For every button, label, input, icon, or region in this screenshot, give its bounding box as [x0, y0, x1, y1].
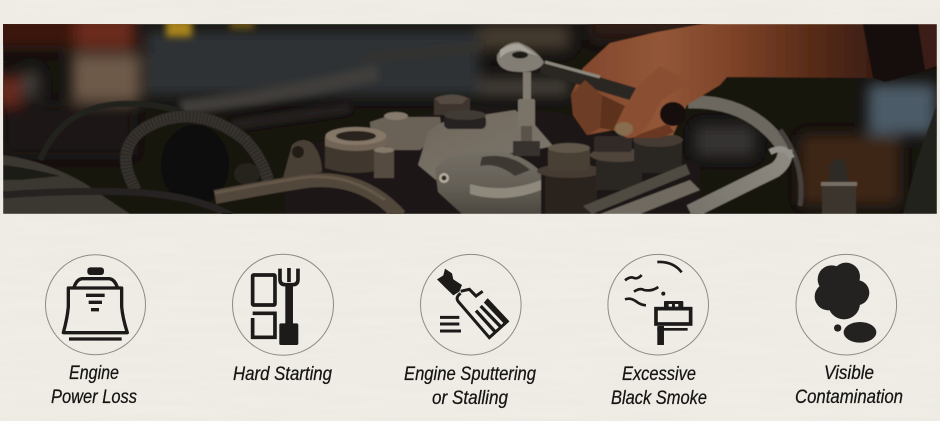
lower left housing [3, 155, 130, 214]
icon item: Visible Contamination [795, 254, 903, 408]
blurred workshop background [0, 10, 936, 205]
dark fabric right [903, 104, 937, 214]
label: Hard Starting [233, 364, 332, 385]
knurled cap [444, 110, 486, 129]
sleeve [863, 24, 937, 82]
label: Engine [69, 363, 119, 384]
central gray casting [418, 110, 553, 180]
lower silver pipe [690, 150, 785, 212]
label: Visible [824, 363, 874, 384]
label: Black Smoke [611, 388, 707, 409]
icon item: Hard Starting [232, 254, 334, 385]
valve cover rail [583, 164, 690, 214]
engine post [821, 158, 857, 214]
ratchet knob [660, 102, 686, 126]
brown pipe [215, 180, 400, 216]
icon: smoke from exhaust stack [625, 262, 691, 345]
label [404, 364, 536, 409]
icon item: Engine Sputtering or Stalling [404, 254, 536, 409]
icon: contamination blob [815, 263, 876, 343]
ratchet wrench [497, 42, 636, 102]
fingers [632, 124, 674, 138]
label: Engine Sputtering [404, 364, 536, 385]
arm and hand [571, 24, 873, 138]
ring [796, 254, 897, 355]
label [611, 364, 707, 409]
icon item: Engine Power Loss [46, 255, 146, 408]
label [51, 363, 137, 408]
label: Power Loss [51, 387, 137, 408]
small nozzle [374, 150, 394, 178]
upper curved silver pipe [688, 102, 785, 150]
top rear fittings [434, 98, 470, 115]
photo: mechanic working on engine with ratchet [0, 10, 937, 216]
bracket [283, 140, 322, 178]
dark hose interior [161, 125, 229, 205]
ring [46, 255, 146, 355]
icon: spark plug fork [437, 269, 507, 338]
thin black hose [40, 104, 195, 160]
corrugated hose [126, 116, 268, 190]
lower left hose [3, 191, 232, 216]
thumb over ratchet [616, 68, 663, 134]
hose stub [234, 163, 260, 185]
coil packs [537, 133, 683, 214]
icon: fuel can [63, 267, 127, 339]
label: Excessive [622, 364, 696, 385]
icon item: Excessive Black Smoke [608, 254, 708, 409]
engine dark base [285, 105, 700, 214]
ring [608, 254, 708, 355]
carburetor body [435, 149, 541, 214]
label [795, 363, 903, 408]
ring [420, 254, 521, 355]
large cup cylinder [325, 127, 387, 173]
label: Contamination [795, 387, 903, 408]
label: or Stalling [432, 388, 508, 409]
upper gray block [370, 117, 442, 150]
ratchet extension [513, 72, 540, 156]
icon: panels and fork tool [253, 268, 298, 345]
ring [232, 254, 334, 355]
